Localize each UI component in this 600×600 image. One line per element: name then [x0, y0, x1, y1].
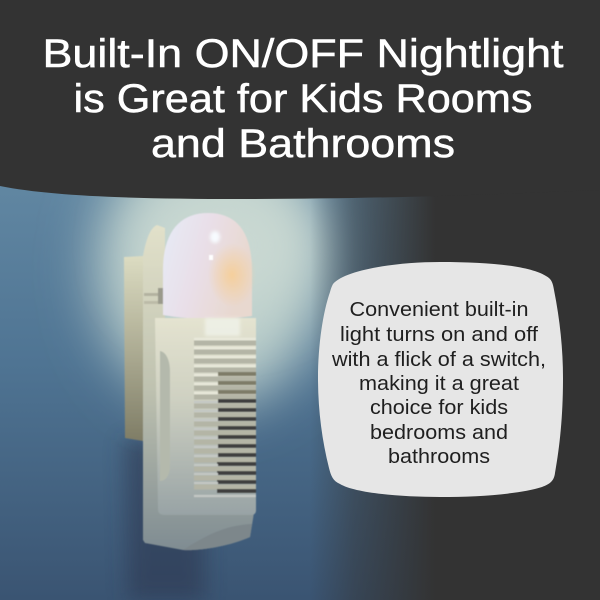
title: is Great for Kids Rooms — [74, 77, 532, 121]
bottom base — [183, 524, 252, 550]
callout text: bathrooms — [388, 445, 490, 468]
callout text: choice for kids — [370, 396, 508, 419]
title — [42, 32, 564, 166]
callout text — [331, 298, 546, 468]
panel: lit wall photo background — [0, 135, 600, 600]
wall outlet plate — [124, 256, 143, 441]
callout text: making it a great — [359, 372, 519, 395]
on/off switch — [144, 288, 163, 304]
dome light — [163, 213, 256, 319]
callout text: light turns on and off — [340, 323, 538, 346]
device shadow on wall — [124, 440, 205, 600]
callout: description bubble — [318, 262, 563, 497]
icon: nightlight air purifier device — [124, 213, 256, 550]
vent slots — [194, 339, 256, 496]
title: and Bathrooms — [151, 122, 455, 166]
side grip recess — [160, 351, 170, 481]
front vented body — [155, 318, 256, 515]
callout text: Convenient built-in — [350, 298, 528, 321]
body collar highlight — [205, 318, 240, 336]
panel: dark title banner with curved edge — [0, 0, 600, 199]
title: Built-In ON/OFF Nightlight — [42, 32, 564, 76]
device rear housing — [143, 225, 256, 550]
callout text: bedrooms and — [370, 421, 508, 444]
callout text: with a flick of a switch, — [331, 348, 546, 371]
